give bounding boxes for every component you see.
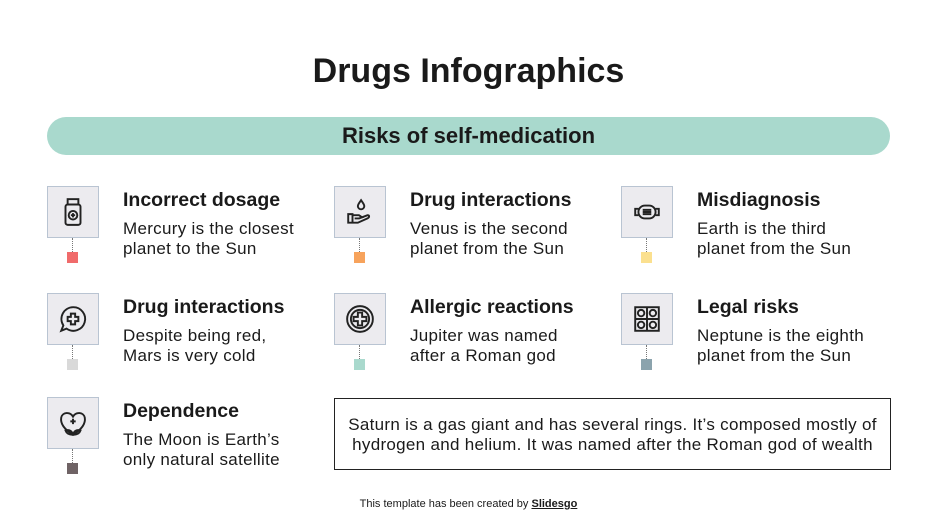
item: dependence: Dependence	[123, 400, 239, 422]
item: misdiagnosis: planet from the Sun	[697, 238, 851, 258]
item: incorrect dosage: planet to the Sun	[123, 238, 257, 258]
item: drug interactions (venus): Venus is the second	[410, 219, 568, 238]
item: allergic reactions	[334, 293, 574, 370]
item: legal risks: planet from the Sun	[697, 346, 851, 364]
icon: mask	[621, 186, 673, 238]
item: incorrect dosage	[47, 186, 294, 263]
item: incorrect dosage: Mercury is the closest	[123, 219, 294, 238]
item: drug interactions (venus): Drug interactions	[410, 189, 571, 211]
item: drug interactions (mars): Mars is very cold	[123, 346, 256, 364]
icon: hand with drops	[334, 186, 386, 238]
title: Drugs Infographics	[313, 52, 624, 90]
item: allergic reactions: after a Roman god	[410, 346, 556, 364]
item: drug interactions (mars): Despite being red,	[123, 326, 266, 345]
icon: circle plus	[334, 293, 386, 345]
item: misdiagnosis	[621, 186, 851, 263]
item: dependence	[47, 397, 280, 474]
item: misdiagnosis: Misdiagnosis	[697, 189, 821, 211]
text box: saturn: hydrogen and helium. It was named after the Roman god of wealth	[352, 435, 873, 454]
text box: saturn: Saturn is a gas giant and has several rings. It’s composed mostly of	[348, 415, 877, 434]
banner: risks of self-medication	[47, 117, 890, 155]
icon: heart with leaves	[47, 397, 99, 449]
item: dependence: The Moon is Earth’s	[123, 430, 280, 449]
item: allergic reactions: Allergic reactions	[410, 296, 574, 318]
text box: saturn	[334, 398, 891, 470]
footer: This template has been created by Slidesgo	[360, 498, 577, 510]
icon: pill bottle	[47, 186, 99, 238]
item: dependence: only natural satellite	[123, 450, 280, 468]
item: drug interactions (venus)	[334, 186, 571, 263]
item: legal risks: Neptune is the eighth	[697, 326, 864, 345]
banner: risks of self-medication: Risks of self-medication	[342, 123, 595, 148]
item: allergic reactions: Jupiter was named	[410, 326, 558, 345]
item: drug interactions (venus): planet from the Sun	[410, 238, 564, 258]
item: drug interactions (mars): Drug interactions	[123, 296, 284, 318]
icon: pill blister	[621, 293, 673, 345]
item: incorrect dosage: Incorrect dosage	[123, 189, 280, 211]
item: drug interactions (mars)	[47, 293, 284, 370]
item: misdiagnosis: Earth is the third	[697, 219, 826, 238]
item: legal risks: Legal risks	[697, 296, 799, 318]
item: legal risks	[621, 293, 864, 370]
icon: speech bubble plus	[47, 293, 99, 345]
